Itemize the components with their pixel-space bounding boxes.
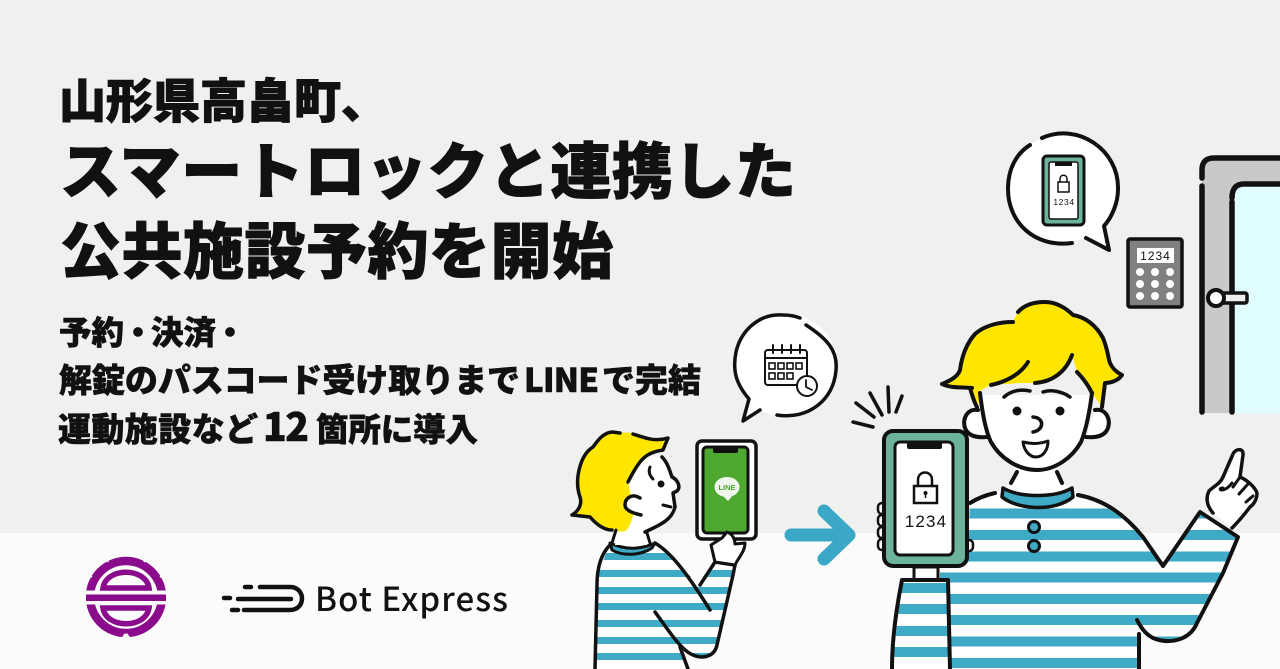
illustration: small person with LINE phone <box>572 432 756 669</box>
subtitle text: 箇所に導入 <box>316 404 478 451</box>
small person hand <box>711 532 745 565</box>
speech bubble: calendar <box>734 314 838 422</box>
face features <box>1004 390 1070 432</box>
phone icon: 1234 <box>1053 197 1075 207</box>
large person sleeve <box>890 567 952 669</box>
large person torso <box>940 491 1240 669</box>
subtitle text <box>58 307 701 453</box>
calendar icon <box>765 345 817 396</box>
large phone with passcode <box>878 431 973 566</box>
illustration: keypad: 1234 <box>1140 249 1171 263</box>
face outline <box>980 393 1092 483</box>
title <box>59 63 796 291</box>
background: lower band <box>0 533 1280 669</box>
large person hand pointing <box>1207 450 1257 528</box>
title: スマートロックと連携した <box>60 122 796 211</box>
buttons <box>1028 522 1040 552</box>
hair <box>942 302 1122 407</box>
title: 公共施設予約を開始 <box>60 202 613 291</box>
logo: Bot Express: Bot Express <box>315 573 508 621</box>
large person head <box>942 302 1122 508</box>
speech bubble: smartphone passcode <box>1008 133 1118 250</box>
title: 山形県高畠町、 <box>59 63 388 132</box>
subtitle text: 解錠のパスコード受け取りまで <box>59 354 520 402</box>
door handle <box>1208 290 1247 306</box>
subtitle text: 決済 <box>151 307 217 354</box>
LINE phone <box>697 441 756 539</box>
small person head <box>572 432 679 545</box>
subtitle text: ・ <box>214 307 246 354</box>
subtitle text: 運動施設など <box>58 403 258 451</box>
subtitle text: ・ <box>122 307 154 354</box>
illustration: large person <box>853 302 1257 669</box>
background: upper panel <box>0 0 1280 533</box>
collar <box>1002 488 1073 508</box>
small person body <box>590 543 740 669</box>
LINE phone: LINE <box>718 483 736 492</box>
large phone with passcode: 1234 <box>905 512 947 531</box>
notification sparks <box>853 387 902 427</box>
illustration: keypad <box>1128 239 1182 307</box>
illustration: door <box>1202 158 1280 413</box>
arrow <box>791 511 849 559</box>
subtitle text: 12 <box>263 397 309 453</box>
subtitle text: 予約 <box>59 307 124 354</box>
subtitle text: LINE <box>524 354 599 402</box>
ears <box>964 410 1109 437</box>
logo: Bot Express <box>224 573 508 621</box>
logo: Takahata town emblem <box>84 556 168 640</box>
subtitle text: で完結 <box>602 354 701 402</box>
